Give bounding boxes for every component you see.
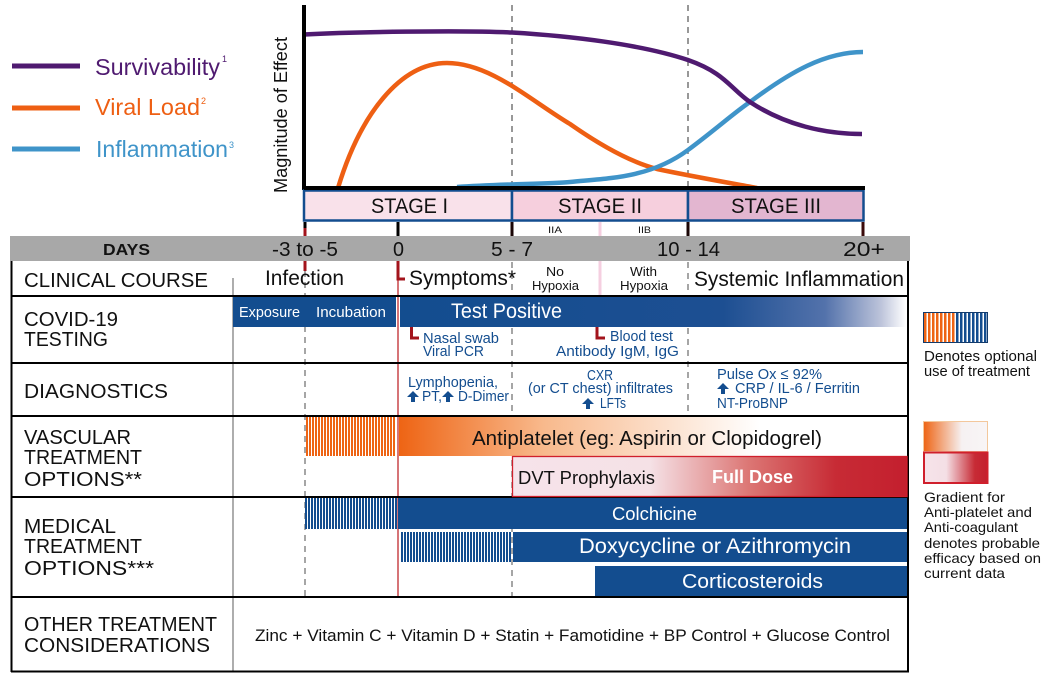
stage I findings: PT,	[422, 388, 442, 405]
dvt prophylaxis bar	[512, 456, 907, 496]
doxycycline or azithromycin bar	[513, 532, 907, 562]
no hypoxia: No	[546, 264, 564, 279]
stage II: STAGE II	[558, 195, 642, 218]
diagnostics row	[407, 366, 860, 412]
label: other treatment considerations: CONSIDERATIONS	[24, 635, 210, 657]
note: gradient: denotes probable	[924, 535, 1040, 551]
substage labels: IIA	[548, 225, 562, 235]
blood test note: Blood test	[610, 328, 674, 345]
days heading: DAYS	[103, 242, 150, 259]
substage labels: IIB	[638, 225, 651, 235]
stage bar	[304, 188, 865, 236]
no hypoxia: Hypoxia	[532, 278, 580, 293]
infection marker	[304, 261, 306, 271]
label: medical treatment options	[24, 516, 154, 580]
label: clinical course: CLINICAL COURSE	[24, 270, 208, 292]
nasal swab note	[412, 327, 499, 360]
doxycycline or azithromycin bar: Doxycycline or Azithromycin	[579, 535, 851, 558]
with hypoxia: Hypoxia	[620, 278, 669, 293]
label: other treatment considerations	[24, 614, 217, 657]
stage III findings: NT-ProBNP	[717, 395, 788, 412]
note: gradient: Anti-coagulant	[924, 519, 1018, 535]
infection: Infection	[265, 267, 344, 290]
swatch: hatched	[924, 312, 988, 342]
legend item: survivability: 1	[222, 54, 227, 64]
label: other treatment considerations: OTHER TREATMENT	[24, 614, 217, 636]
stage I: STAGE I	[371, 195, 448, 218]
corticosteroids bar: Corticosteroids	[682, 571, 823, 593]
curve: inflammation	[457, 52, 863, 187]
stage II findings: LFTs	[600, 395, 626, 412]
colchicine bar: Colchicine	[612, 504, 697, 524]
stage II findings: (or CT chest) infiltrates	[528, 380, 673, 397]
legend item: viral load: Viral Load	[95, 94, 200, 120]
legend item: survivability: Survivability	[95, 54, 220, 80]
day numbers: 0	[393, 239, 404, 261]
day numbers: 20+	[843, 239, 885, 261]
legend: curves	[12, 54, 234, 162]
systemic inflammation: Systemic Inflammation	[694, 268, 904, 291]
label: vascular treatment options	[24, 427, 142, 491]
stage II	[512, 190, 688, 220]
note: gradient: current data	[924, 565, 1005, 581]
row labels	[24, 270, 217, 657]
no hypoxia	[532, 264, 580, 293]
substage labels	[548, 225, 651, 235]
label: medical treatment options: OPTIONS***	[24, 558, 154, 580]
dvt prophylaxis bar: Full Dose	[712, 467, 793, 487]
note: gradient	[924, 489, 1041, 581]
optional doxycycline hatch	[400, 532, 512, 562]
label: vascular treatment options: OPTIONS**	[24, 469, 142, 491]
note: gradient: Gradient for	[924, 489, 1005, 505]
swatch: anticoagulant gradient	[924, 452, 988, 483]
test positive bar	[400, 297, 906, 327]
chart axes	[304, 5, 865, 188]
symptoms: Symptoms*	[409, 267, 516, 290]
legend item: viral load: 2	[201, 96, 206, 106]
dvt prophylaxis bar: DVT Prophylaxis	[518, 468, 655, 488]
stage III: STAGE III	[731, 195, 821, 218]
covid-19 testing row	[233, 297, 906, 360]
stage III findings: Pulse Ox ≤ 92%	[717, 366, 822, 383]
colchicine bar	[398, 498, 907, 529]
day numbers	[272, 239, 885, 261]
line chart: magnitude of effect	[271, 5, 865, 193]
vascular treatment row	[306, 417, 907, 496]
with hypoxia	[620, 264, 669, 293]
label: covid-19 testing: COVID-19	[24, 309, 118, 331]
optional colchicine hatch	[305, 498, 397, 529]
stage III findings	[717, 366, 860, 412]
note: gradient: Anti-platelet and	[924, 504, 1032, 520]
exposure and incubation bar: Exposure	[239, 305, 300, 321]
curve: viral load	[338, 63, 757, 188]
legend item: inflammation: Inflammation	[96, 136, 228, 162]
antiplatelet bar	[399, 417, 907, 456]
antiplatelet bar: Antiplatelet (eg: Aspirin or Clopidogrel)	[472, 428, 822, 450]
stage I	[304, 190, 512, 220]
stage III findings: CRP / IL-6 / Ferritin	[735, 380, 860, 397]
label: covid-19 testing: TESTING	[24, 329, 108, 351]
stage I findings: D-Dimer	[458, 388, 509, 405]
label: vascular treatment options: TREATMENT	[24, 447, 142, 469]
corticosteroids bar	[595, 566, 907, 596]
stage I findings: Lymphopenia,	[408, 374, 498, 391]
stage tick marks	[305, 222, 863, 236]
stage I findings	[407, 374, 509, 405]
legend item: inflammation: 3	[229, 140, 234, 150]
stage II findings: CXR	[587, 367, 613, 384]
label: vascular treatment options: VASCULAR	[24, 427, 131, 449]
stage II findings	[528, 367, 673, 412]
note: optional: Denotes optional	[924, 349, 1037, 365]
with hypoxia: With	[630, 264, 657, 279]
side legend: optional treatment	[924, 312, 1037, 380]
stage III	[688, 190, 864, 220]
label: covid-19 testing	[24, 309, 118, 351]
day numbers: 5 - 7	[491, 239, 533, 261]
side legend: gradient	[924, 422, 1041, 581]
legend item: viral load	[12, 94, 206, 120]
test positive bar: Test Positive	[451, 300, 562, 323]
exposure and incubation bar	[233, 297, 396, 327]
symptoms marker	[398, 261, 405, 279]
day numbers: -3 to -5	[272, 239, 338, 261]
note: optional: use of treatment	[924, 364, 1030, 380]
nasal swab note: Viral PCR	[423, 343, 484, 360]
swatch: antiplatelet gradient	[924, 422, 988, 452]
label: medical treatment options: MEDICAL	[24, 516, 116, 538]
blood test note: Antibody IgM, IgG	[556, 343, 679, 360]
days header bar	[10, 236, 910, 261]
optional antiplatelet hatch	[306, 417, 396, 456]
table grid and timeline guides	[11, 261, 909, 672]
IIA / IIB divider	[598, 222, 602, 295]
blood test note	[556, 327, 679, 360]
chart top border of stage bar	[304, 186, 865, 190]
curve: survivability	[304, 31, 862, 134]
note: optional	[924, 349, 1037, 380]
axis label: Magnitude of Effect	[271, 37, 291, 193]
legend item: inflammation	[12, 136, 234, 162]
medical treatment row	[305, 498, 907, 596]
legend item: survivability	[12, 54, 227, 80]
other treatment considerations text: Zinc + Vitamin C + Vitamin D + Statin + Famotidine + BP Control + Glucose Control	[255, 627, 890, 645]
day numbers: 10 - 14	[657, 239, 720, 261]
note: gradient: efficacy based on	[924, 550, 1041, 566]
exposure and incubation bar: Incubation	[316, 305, 386, 321]
label: diagnostics: DIAGNOSTICS	[24, 381, 168, 403]
nasal swab note: Nasal swab	[423, 330, 499, 347]
clinical course row	[265, 261, 904, 293]
label: medical treatment options: TREATMENT	[24, 536, 142, 558]
